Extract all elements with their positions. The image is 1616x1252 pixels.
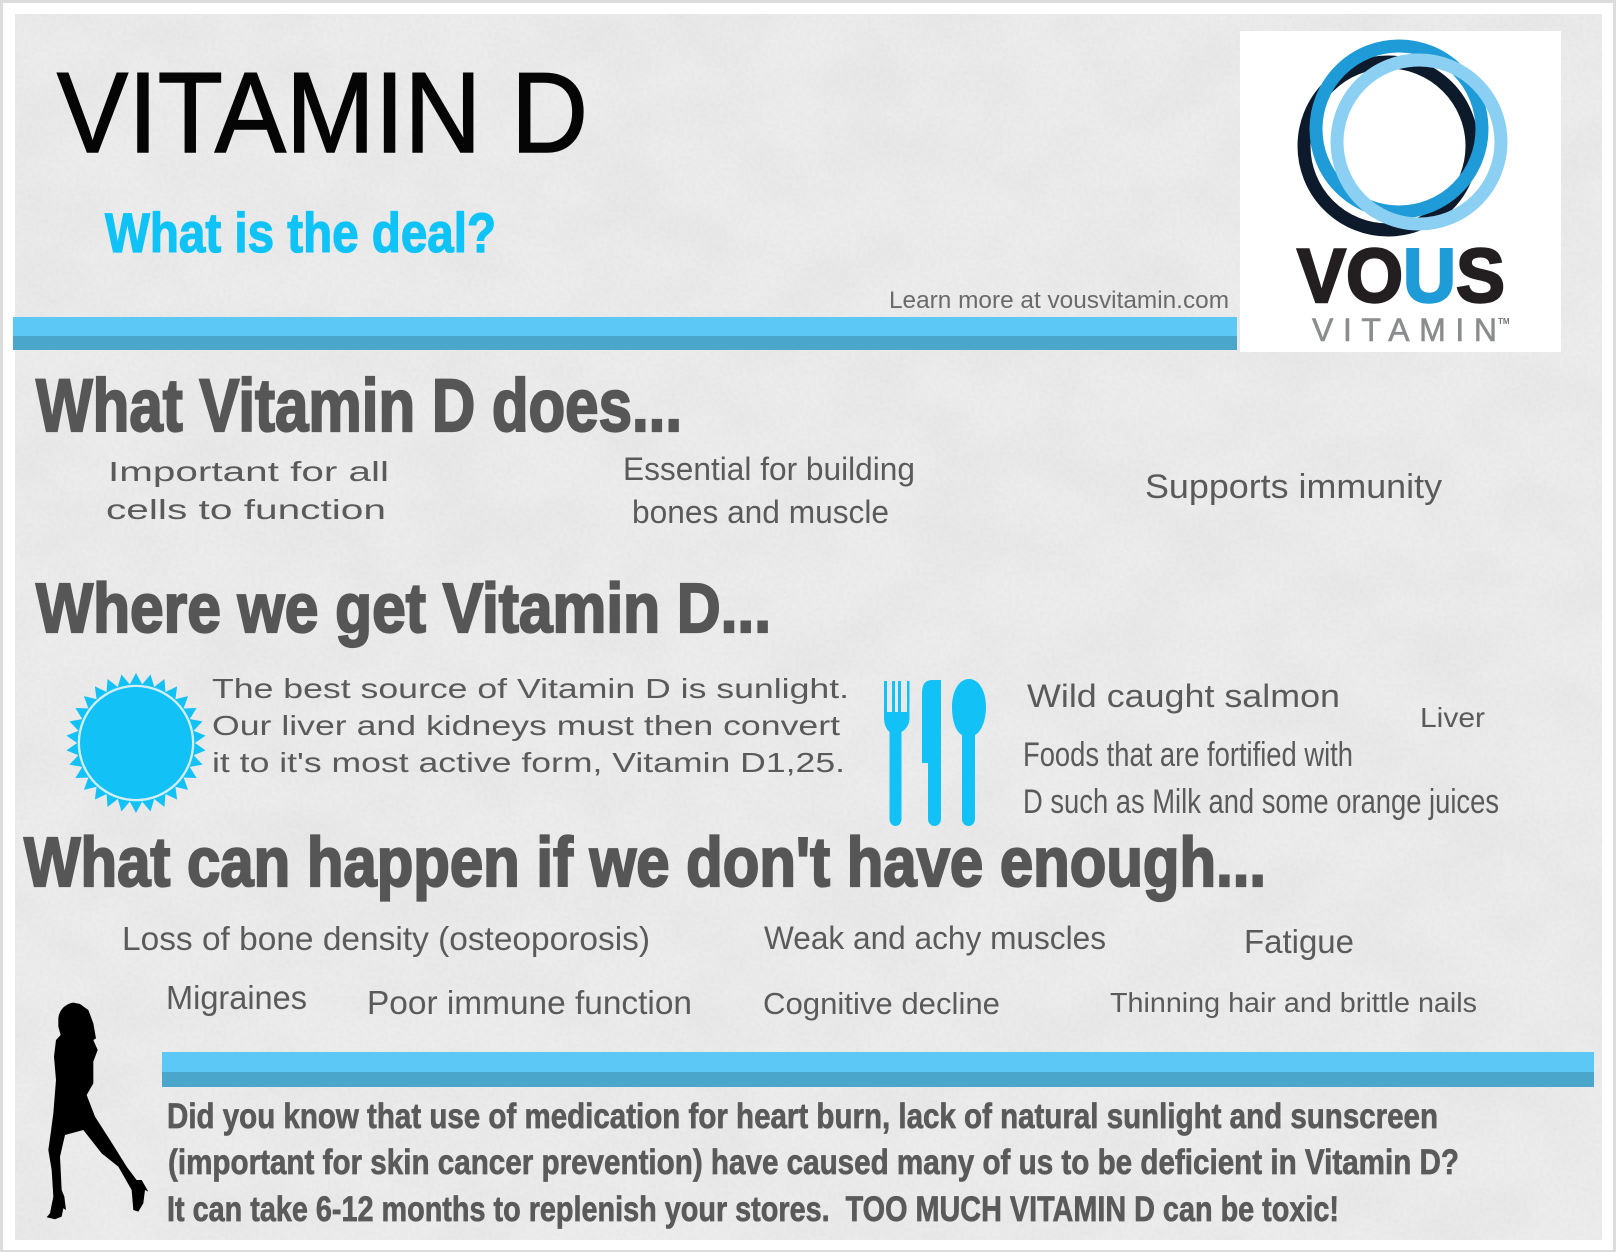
symptom: cognitive: Cognitive decline bbox=[763, 986, 1000, 1021]
symptom: muscles: Weak and achy muscles bbox=[764, 920, 1106, 956]
symptom: bone density: Loss of bone density (osteoporosis) bbox=[122, 920, 650, 957]
icon: woman silhouette bbox=[47, 1003, 148, 1219]
sunlight text: The best source of Vitamin D is sunlight. bbox=[212, 673, 849, 704]
symptom: immune: Poor immune function bbox=[367, 984, 692, 1021]
subtitle: What is the deal? bbox=[105, 201, 496, 264]
icon: fork, knife and spoon bbox=[884, 679, 986, 826]
heading: where we get vitamin d: Where we get Vitamin D... bbox=[36, 569, 771, 647]
heading: deficiency: What can happen if we don't have enough... bbox=[24, 823, 1266, 901]
benefit: immunity: Supports immunity bbox=[1145, 468, 1442, 506]
food: fortified foods: D such as Milk and some orange juices bbox=[1023, 783, 1499, 821]
benefit: cells bbox=[106, 456, 389, 525]
logo rings bbox=[1304, 46, 1501, 230]
sunlight text bbox=[212, 673, 849, 778]
knife bbox=[922, 680, 941, 826]
food: salmon: Wild caught salmon bbox=[1027, 678, 1340, 714]
bottom blue bar bbox=[162, 1052, 1594, 1087]
icon: sun bbox=[66, 673, 206, 813]
did you know callout bbox=[167, 1097, 1459, 1229]
logo wordmark: VOUS bbox=[1297, 234, 1505, 319]
logo sub-wordmark: VITAMIN bbox=[1312, 312, 1497, 348]
benefit: bones and muscle bbox=[623, 451, 915, 530]
food: fortified foods: Foods that are fortified with bbox=[1023, 736, 1353, 774]
sunlight text: it to it's most active form, Vitamin D1,25. bbox=[212, 747, 845, 778]
symptom: hair and nails: Thinning hair and brittle nails bbox=[1110, 987, 1477, 1018]
benefit: cells: cells to function bbox=[106, 494, 386, 525]
symptom: migraines: Migraines bbox=[166, 979, 307, 1016]
logo: Vous Vitamin bbox=[1240, 31, 1561, 352]
food: liver: Liver bbox=[1420, 702, 1485, 733]
spoon bbox=[952, 679, 986, 826]
title: VITAMIN D bbox=[57, 50, 588, 177]
website link text: Learn more at vousvitamin.com bbox=[889, 287, 1229, 314]
benefit: bones and muscle: Essential for building bbox=[623, 451, 915, 487]
trademark: TM bbox=[1498, 317, 1510, 326]
heading: what vitamin d does: What Vitamin D does... bbox=[36, 364, 682, 447]
deficiency symptoms bbox=[122, 920, 1477, 1021]
top blue bar bbox=[13, 317, 1237, 350]
benefit: cells: Important for all bbox=[108, 456, 389, 487]
did you know callout: It can take 6-12 months to replenish your stores. TOO MUCH VITAMIN D can be toxic! bbox=[167, 1190, 1339, 1229]
food: fortified foods bbox=[1023, 736, 1499, 821]
symptom: fatigue: Fatigue bbox=[1244, 923, 1354, 960]
benefit: bones and muscle: bones and muscle bbox=[632, 494, 889, 530]
fork bbox=[884, 681, 910, 826]
sunlight text: Our liver and kidneys must then convert bbox=[212, 710, 840, 741]
